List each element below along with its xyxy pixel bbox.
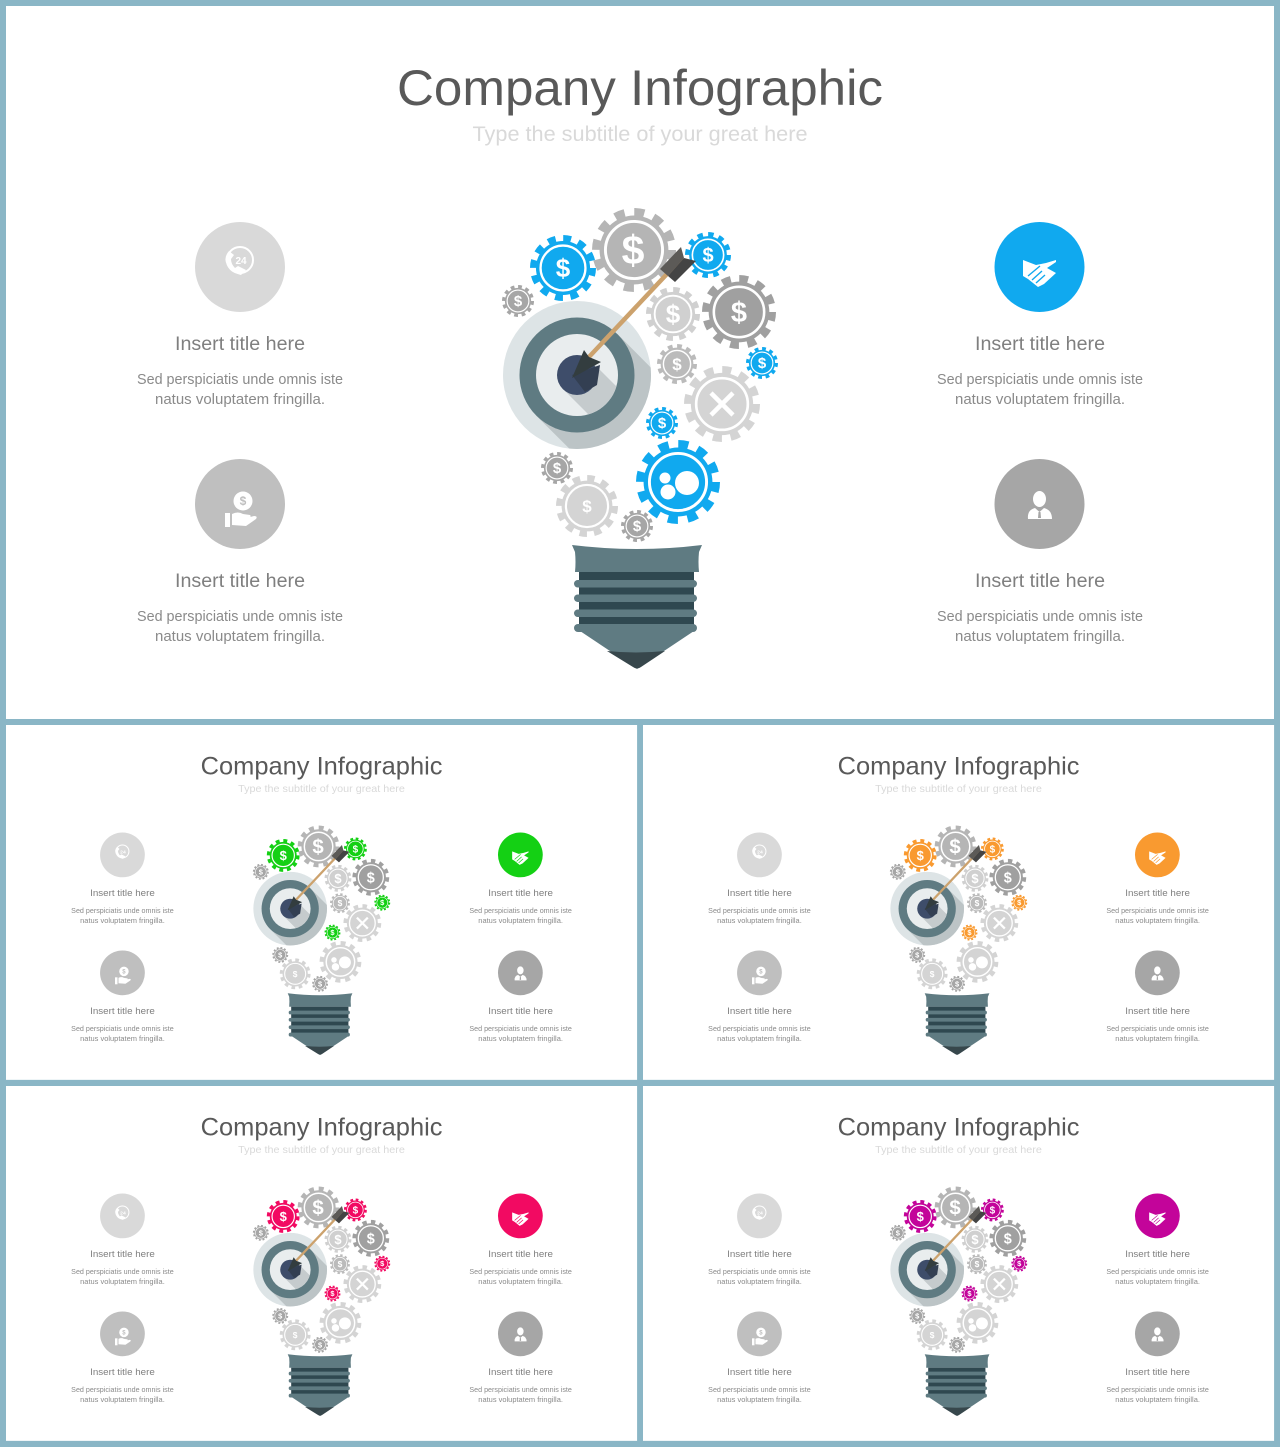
- item: bottom right: Insert title here: [1125, 1006, 1190, 1017]
- panel: green slide: [6, 725, 637, 1080]
- lightbulb illustration: $: [658, 415, 667, 432]
- item: bottom right: [1106, 1311, 1209, 1404]
- item: bottom right: [469, 1311, 572, 1404]
- lightbulb illustration: $: [990, 1205, 996, 1216]
- item: top right: natus voluptatem fringilla.: [1115, 916, 1200, 925]
- item: bottom left: natus voluptatem fringilla.: [80, 1395, 165, 1404]
- item: top left: Sed perspiciatis unde omnis iste: [708, 1267, 811, 1276]
- item: bottom left: [708, 1311, 811, 1404]
- item: bottom right: Sed perspiciatis unde omnis iste: [1106, 1385, 1209, 1394]
- item: bottom left: Insert title here: [727, 1367, 792, 1378]
- item: top left: natus voluptatem fringilla.: [717, 916, 802, 925]
- lightbulb illustration: $: [990, 844, 996, 855]
- item: top right: natus voluptatem fringilla.: [1115, 1277, 1200, 1286]
- item: top right: natus voluptatem fringilla.: [955, 391, 1125, 408]
- item: top left: [137, 222, 343, 408]
- item: bottom left: Insert title here: [175, 571, 305, 592]
- item: top left: Sed perspiciatis unde omnis iste: [137, 371, 343, 388]
- item: bottom right: Insert title here: [975, 571, 1105, 592]
- item: bottom left: Sed perspiciatis unde omnis iste: [708, 1385, 811, 1394]
- panel: pink slide: [6, 1086, 637, 1441]
- panel: magenta slide: [643, 1086, 1274, 1441]
- item: top right: natus voluptatem fringilla.: [478, 916, 563, 925]
- lightbulb illustration: $: [353, 844, 359, 855]
- item: top right: Sed perspiciatis unde omnis iste: [469, 1267, 572, 1276]
- item: top right: [1106, 1194, 1209, 1286]
- item: top right: Insert title here: [975, 334, 1105, 355]
- item: bottom right: Sed perspiciatis unde omnis iste: [469, 1385, 572, 1394]
- item: top right: natus voluptatem fringilla.: [478, 1277, 563, 1286]
- item: top left: Insert title here: [175, 334, 305, 355]
- item: top right: [469, 1194, 572, 1286]
- lightbulb illustration: $: [1017, 898, 1022, 907]
- title: Company Infographic: [201, 1113, 442, 1141]
- item: bottom left: Insert title here: [90, 1367, 155, 1378]
- subtitle: Type the subtitle of your great here: [238, 1145, 405, 1156]
- lightbulb illustration: $: [967, 1289, 972, 1298]
- item: top left: natus voluptatem fringilla.: [717, 1277, 802, 1286]
- item: bottom left: Insert title here: [727, 1006, 792, 1017]
- item: bottom left: natus voluptatem fringilla.: [717, 1395, 802, 1404]
- item: top right: Insert title here: [488, 888, 553, 899]
- item: top right: Insert title here: [488, 1249, 553, 1260]
- item: bottom left: natus voluptatem fringilla.: [717, 1034, 802, 1043]
- panel: orange slide: [643, 725, 1274, 1080]
- lightbulb illustration: $: [280, 1209, 288, 1224]
- item: bottom left: natus voluptatem fringilla.: [155, 628, 325, 645]
- lightbulb illustration: [253, 1189, 389, 1416]
- item: top left: Insert title here: [727, 888, 792, 899]
- lightbulb illustration: [890, 828, 1026, 1055]
- item: bottom right: Insert title here: [1125, 1367, 1190, 1378]
- lightbulb illustration: $: [380, 1259, 385, 1268]
- item: top left: [71, 833, 174, 925]
- lightbulb illustration: $: [280, 848, 288, 863]
- lightbulb illustration: $: [330, 1289, 335, 1298]
- lightbulb illustration: $: [1017, 1259, 1022, 1268]
- item: top left: Insert title here: [727, 1249, 792, 1260]
- item: top right: Sed perspiciatis unde omnis iste: [1106, 1267, 1209, 1276]
- lightbulb illustration: $: [917, 848, 925, 863]
- item: top left: natus voluptatem fringilla.: [155, 391, 325, 408]
- item: bottom right: Sed perspiciatis unde omnis iste: [937, 608, 1143, 625]
- title: Company Infographic: [201, 752, 442, 780]
- item: bottom right: natus voluptatem fringilla.: [478, 1034, 563, 1043]
- lightbulb illustration: $: [967, 928, 972, 937]
- title: Company Infographic: [838, 752, 1079, 780]
- item: bottom right: natus voluptatem fringilla.: [1115, 1395, 1200, 1404]
- lightbulb illustration: [890, 1189, 1026, 1416]
- item: top right: Sed perspiciatis unde omnis iste: [937, 371, 1143, 388]
- item: top right: Sed perspiciatis unde omnis iste: [469, 906, 572, 915]
- item: top left: Sed perspiciatis unde omnis iste: [71, 906, 174, 915]
- lightbulb illustration: $: [330, 928, 335, 937]
- item: bottom right: natus voluptatem fringilla.: [955, 628, 1125, 645]
- subtitle: Type the subtitle of your great here: [472, 123, 808, 146]
- title: Company Infographic: [838, 1113, 1079, 1141]
- item: top right: Sed perspiciatis unde omnis iste: [1106, 906, 1209, 915]
- item: bottom left: Sed perspiciatis unde omnis iste: [71, 1385, 174, 1394]
- item: top right: [469, 833, 572, 925]
- item: top left: Sed perspiciatis unde omnis iste: [71, 1267, 174, 1276]
- item: bottom right: [937, 459, 1143, 645]
- item: bottom left: [71, 950, 174, 1043]
- title: Company Infographic: [397, 60, 883, 116]
- subtitle: Type the subtitle of your great here: [875, 1145, 1042, 1156]
- item: bottom right: natus voluptatem fringilla.: [1115, 1034, 1200, 1043]
- subtitle: Type the subtitle of your great here: [875, 784, 1042, 795]
- item: top right: [937, 222, 1143, 408]
- item: bottom left: natus voluptatem fringilla.: [80, 1034, 165, 1043]
- item: bottom right: [469, 950, 572, 1043]
- lightbulb illustration: $: [556, 253, 571, 283]
- lightbulb illustration: $: [702, 245, 714, 267]
- item: top right: Insert title here: [1125, 888, 1190, 899]
- panel: main blue slide: [6, 6, 1274, 719]
- item: top left: natus voluptatem fringilla.: [80, 1277, 165, 1286]
- lightbulb illustration: [503, 212, 776, 669]
- item: bottom right: Sed perspiciatis unde omnis iste: [1106, 1024, 1209, 1033]
- lightbulb illustration: $: [758, 355, 767, 372]
- item: top left: [708, 833, 811, 925]
- item: bottom left: Insert title here: [90, 1006, 155, 1017]
- item: top left: natus voluptatem fringilla.: [80, 916, 165, 925]
- lightbulb illustration: [253, 828, 389, 1055]
- item: bottom right: [1106, 950, 1209, 1043]
- lightbulb illustration: $: [353, 1205, 359, 1216]
- item: bottom right: natus voluptatem fringilla.: [478, 1395, 563, 1404]
- item: top left: [71, 1194, 174, 1286]
- item: top left: [708, 1194, 811, 1286]
- item: bottom left: Sed perspiciatis unde omnis iste: [708, 1024, 811, 1033]
- item: bottom left: Sed perspiciatis unde omnis iste: [71, 1024, 174, 1033]
- item: top right: Insert title here: [1125, 1249, 1190, 1260]
- item: bottom right: Sed perspiciatis unde omnis iste: [469, 1024, 572, 1033]
- item: top right: [1106, 833, 1209, 925]
- lightbulb illustration: $: [917, 1209, 925, 1224]
- item: top left: Sed perspiciatis unde omnis iste: [708, 906, 811, 915]
- item: bottom right: Insert title here: [488, 1006, 553, 1017]
- lightbulb illustration: $: [380, 898, 385, 907]
- item: bottom right: Insert title here: [488, 1367, 553, 1378]
- subtitle: Type the subtitle of your great here: [238, 784, 405, 795]
- item: bottom left: [137, 459, 343, 645]
- item: bottom left: [708, 950, 811, 1043]
- item: top left: Insert title here: [90, 888, 155, 899]
- item: bottom left: Sed perspiciatis unde omnis iste: [137, 608, 343, 625]
- item: bottom left: [71, 1311, 174, 1404]
- item: top left: Insert title here: [90, 1249, 155, 1260]
